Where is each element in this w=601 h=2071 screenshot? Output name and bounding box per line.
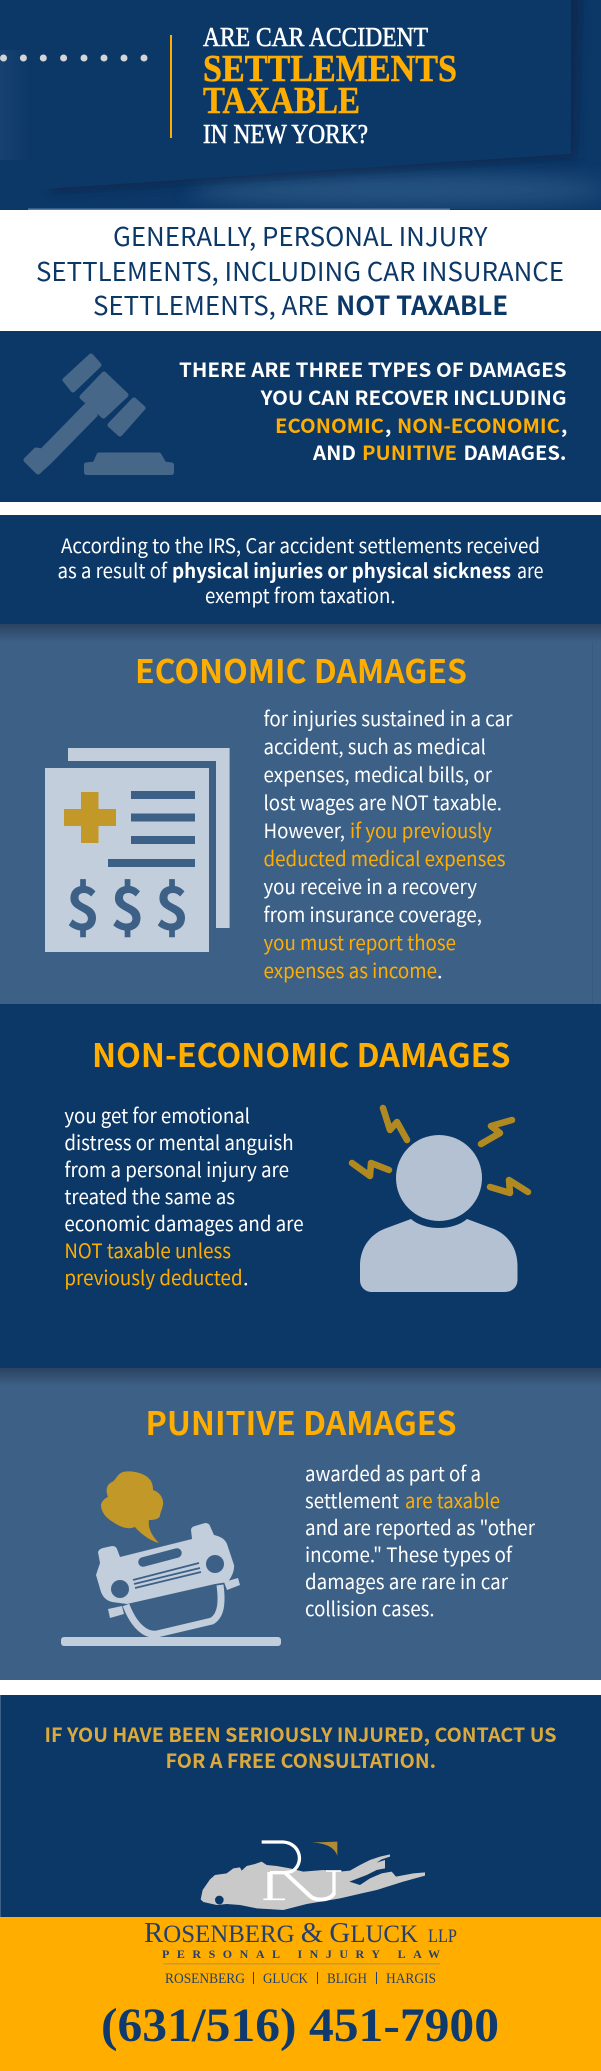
panel: summary statement: NOT TAXABLE: [336, 286, 508, 323]
icon: head with pain bolts: [352, 1108, 528, 1292]
icon: overturned car with smoke: [61, 1471, 281, 1646]
text: three types: NON-ECONOMIC: [397, 410, 560, 439]
text: three types: YOU CAN RECOVER INCLUDING: [260, 382, 567, 411]
panel: punitive damages: [0, 1368, 601, 1680]
panel: IRS note: According to the IRS, Car accident settlements received: [61, 530, 540, 559]
text: non-economic body: from a personal injury are: [64, 1154, 289, 1183]
panel: header: [0, 0, 601, 210]
panel: IRS note: are: [517, 555, 544, 584]
title: IN NEW YORK?: [203, 119, 368, 149]
panel: summary statement: SETTLEMENTS, INCLUDING CAR INSURANCE: [36, 252, 564, 289]
text: economic body: .: [437, 955, 443, 984]
text: punitive body: are taxable: [405, 1485, 500, 1514]
icon: gavel: [26, 356, 172, 472]
panel: non-economic damages: [0, 1004, 601, 1368]
text: contact prompt: FOR A FREE CONSULTATION.: [166, 1745, 436, 1774]
text: economic body: However,: [264, 815, 345, 844]
text: economic body: you must report those: [264, 927, 456, 956]
text: economic body: accident, such as medical: [264, 731, 486, 760]
text: non-economic body: you get for emotional: [64, 1100, 250, 1129]
text: economic body: for injuries sustained in a car: [264, 703, 513, 732]
firm name: GLUCK: [263, 1971, 308, 1987]
text: punitive body: [305, 1458, 535, 1622]
text: economic body: lost wages are NOT taxable.: [264, 787, 502, 816]
text: punitive body: income." These types of: [305, 1539, 513, 1568]
text: three types: DAMAGES.: [464, 437, 566, 466]
dotted line: [0, 54, 148, 62]
text: three types: THERE ARE THREE TYPES OF DAMAGES: [179, 354, 566, 383]
text: punitive body: awarded as part of a: [305, 1458, 481, 1487]
firm name: ROSENBERG & GLUCK: [144, 1917, 418, 1949]
text: three types: ,: [561, 410, 567, 439]
text: economic body: expenses, medical bills, or: [264, 759, 492, 788]
panel: summary statement: SETTLEMENTS, ARE: [93, 286, 329, 323]
text: punitive body: damages are rare in car: [305, 1566, 508, 1595]
firm name: ROSENBERG: [165, 1971, 245, 1987]
text: punitive body: collision cases.: [305, 1593, 435, 1622]
gold divider: [170, 35, 172, 138]
panel: call to action: [0, 1695, 601, 1917]
panel: summary statement: GENERALLY, PERSONAL INJURY: [113, 217, 488, 254]
logo: Long Island with RG monogram: [201, 1842, 425, 1910]
icon: medical bill: $: [66, 861, 100, 948]
text: punitive body: and are reported as "other: [305, 1512, 535, 1541]
panel: economic damages: [0, 624, 601, 1004]
text: three types: ECONOMIC: [275, 410, 384, 439]
text: punitive body: settlement: [305, 1485, 399, 1514]
firm name: PERSONAL INJURY LAW: [162, 1947, 440, 1961]
text: non-economic body: [64, 1100, 304, 1291]
firm name: [144, 1917, 457, 1987]
heading: NON-ECONOMIC DAMAGES: [92, 1030, 510, 1077]
firm name: BLIGH: [327, 1971, 367, 1987]
phone number: (631/516) 451-7900: [101, 1999, 499, 2052]
panel: IRS note: as a result of: [58, 555, 168, 584]
firm name: HARGIS: [386, 1971, 436, 1987]
text: three types: [179, 354, 567, 466]
text: economic body: if you previously: [350, 815, 493, 844]
panel: IRS note: [0, 515, 601, 624]
text: economic body: from insurance coverage,: [264, 899, 482, 928]
text: non-economic body: distress or mental anguish: [64, 1127, 294, 1156]
heading: PUNITIVE DAMAGES: [146, 1398, 456, 1445]
text: non-economic body: economic damages and are: [64, 1208, 304, 1237]
text: economic body: expenses as income: [264, 955, 437, 984]
firm name: LLP: [428, 1926, 457, 1947]
text: three types: AND: [312, 437, 356, 466]
panel: summary statement: [0, 210, 601, 331]
text: non-economic body: treated the same as: [64, 1181, 235, 1210]
icon: medical bill: $: [155, 861, 189, 948]
text: economic body: you receive in a recovery: [264, 871, 478, 900]
title: TAXABLE: [203, 80, 360, 122]
text: three types: ,: [385, 410, 391, 439]
icon: medical bill: [45, 748, 230, 952]
panel: IRS note: physical injuries or physical sickness: [172, 555, 511, 584]
text: non-economic body: .: [243, 1262, 249, 1291]
panel: three types of damages: [0, 331, 601, 502]
title: [203, 22, 457, 149]
title: SETTLEMENTS: [203, 48, 457, 90]
text: non-economic body: previously deducted: [64, 1262, 243, 1291]
text: three types: PUNITIVE: [362, 437, 457, 466]
heading: ECONOMIC DAMAGES: [135, 646, 467, 693]
text: contact prompt: [44, 1719, 556, 1774]
text: economic body: [264, 703, 513, 984]
text: economic body: deducted medical expenses: [264, 843, 506, 872]
title: ARE CAR ACCIDENT: [203, 22, 428, 52]
icon: medical bill: $: [110, 861, 144, 948]
panel: firm details: [0, 1917, 601, 2071]
text: non-economic body: NOT taxable unless: [64, 1235, 231, 1264]
panel: IRS note: exempt from taxation.: [205, 580, 396, 609]
text: contact prompt: IF YOU HAVE BEEN SERIOUSLY INJURED, CONTACT US: [44, 1719, 556, 1748]
